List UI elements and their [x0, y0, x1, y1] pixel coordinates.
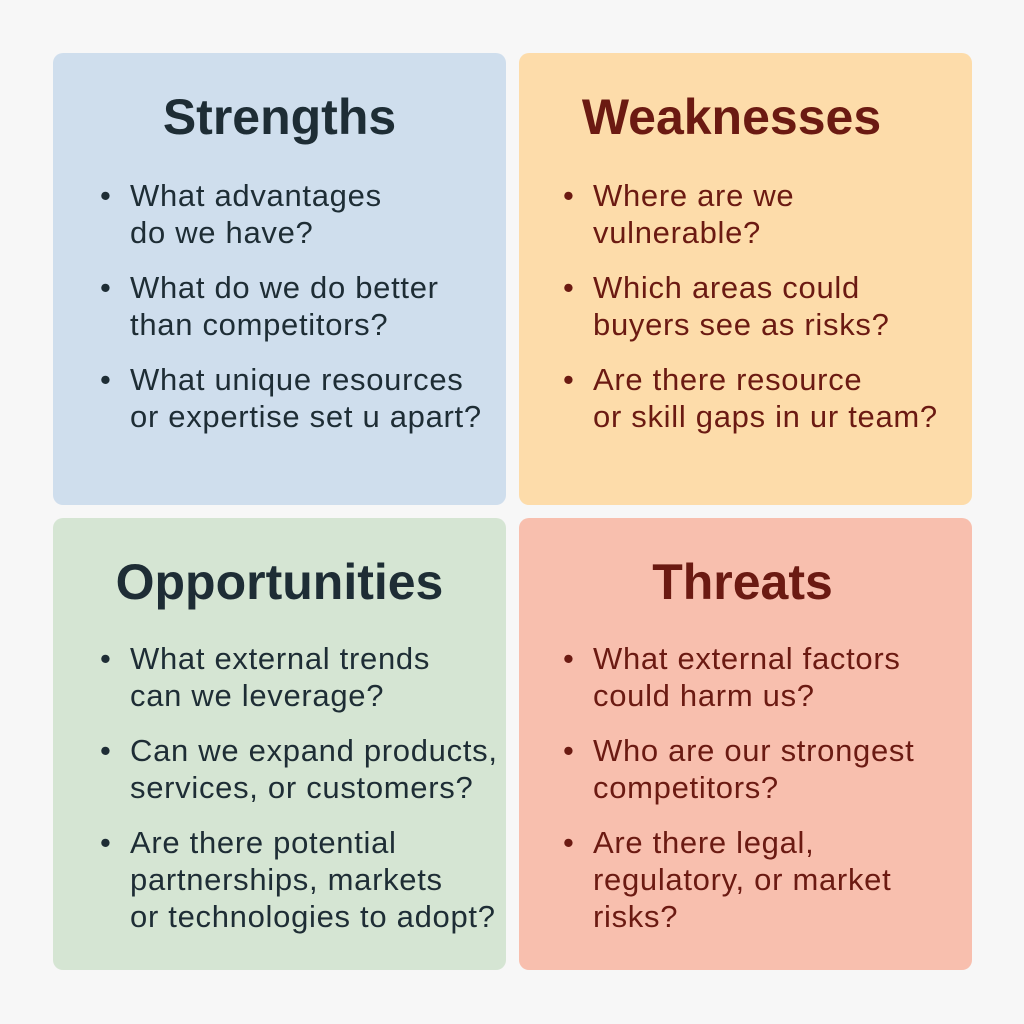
panel: weaknesses: [519, 53, 972, 505]
bullet: better: than competitors?: [130, 307, 388, 342]
bullet: resources: or expertise set u apart?: [130, 399, 482, 434]
panel: strengths: •: [100, 178, 112, 213]
bullet: advantages: What advantages: [130, 178, 382, 213]
bullet: trends: [100, 641, 430, 713]
panel: threats: •: [563, 733, 575, 768]
bullet: legal: Are there legal,: [593, 825, 814, 860]
bullet: partnerships: partnerships, markets: [130, 862, 443, 897]
bullet: competitors: [563, 733, 914, 805]
bullet: trends: can we leverage?: [130, 678, 384, 713]
bullet: vulnerable: [563, 178, 794, 250]
bullet: competitors: Who are our strongest: [593, 733, 914, 768]
heading: opportunities: Opportunities: [116, 554, 443, 610]
bullet: gaps: Are there resource: [593, 362, 862, 397]
bullet: gaps: [563, 362, 938, 434]
panel: threats: •: [563, 825, 575, 860]
bullet: expand: services, or customers?: [130, 770, 473, 805]
bullet: risks: Which areas could: [593, 270, 860, 305]
panel: threats: •: [563, 641, 575, 676]
bullet: risks: [563, 270, 890, 342]
panel: weaknesses: •: [563, 178, 575, 213]
bullet: expand: Can we expand products,: [130, 733, 498, 768]
bullet: gaps: or skill gaps in ur team?: [593, 399, 938, 434]
panel: opportunities: •: [100, 733, 112, 768]
bullet: advantages: [100, 178, 382, 250]
panel: strengths: •: [100, 362, 112, 397]
bullet: vulnerable: Where are we: [593, 178, 794, 213]
bullet: better: What do we do better: [130, 270, 439, 305]
panel: opportunities: [53, 518, 506, 970]
bullet: legal: regulatory, or market: [593, 862, 891, 897]
panel: strengths: •: [100, 270, 112, 305]
bullet: risks: buyers see as risks?: [593, 307, 890, 342]
bullet: better: [100, 270, 439, 342]
bullet: external factors: could harm us?: [593, 678, 815, 713]
heading: threats: Threats: [652, 554, 833, 610]
panel: weaknesses: •: [563, 270, 575, 305]
bullet: external factors: What external factors: [593, 641, 901, 676]
bullet: trends: What external trends: [130, 641, 430, 676]
heading: strengths: Strengths: [163, 89, 396, 145]
bullet: legal: [563, 825, 891, 934]
bullet: external factors: [563, 641, 901, 713]
bullet: partnerships: Are there potential: [130, 825, 397, 860]
bullet: competitors: competitors?: [593, 770, 779, 805]
bullet: partnerships: or technologies to adopt?: [130, 899, 496, 934]
bullet: expand: [100, 733, 498, 805]
bullet: resources: [100, 362, 482, 434]
bullet: vulnerable: vulnerable?: [593, 215, 761, 250]
bullet: advantages: do we have?: [130, 215, 314, 250]
panel: opportunities: •: [100, 825, 112, 860]
panel: strengths: [53, 53, 506, 505]
panel: opportunities: •: [100, 641, 112, 676]
panel: threats: [519, 518, 972, 970]
bullet: resources: What unique resources: [130, 362, 463, 397]
heading: weaknesses: Weaknesses: [582, 89, 881, 145]
bullet: partnerships: [100, 825, 496, 934]
panel: weaknesses: •: [563, 362, 575, 397]
bullet: legal: risks?: [593, 899, 678, 934]
